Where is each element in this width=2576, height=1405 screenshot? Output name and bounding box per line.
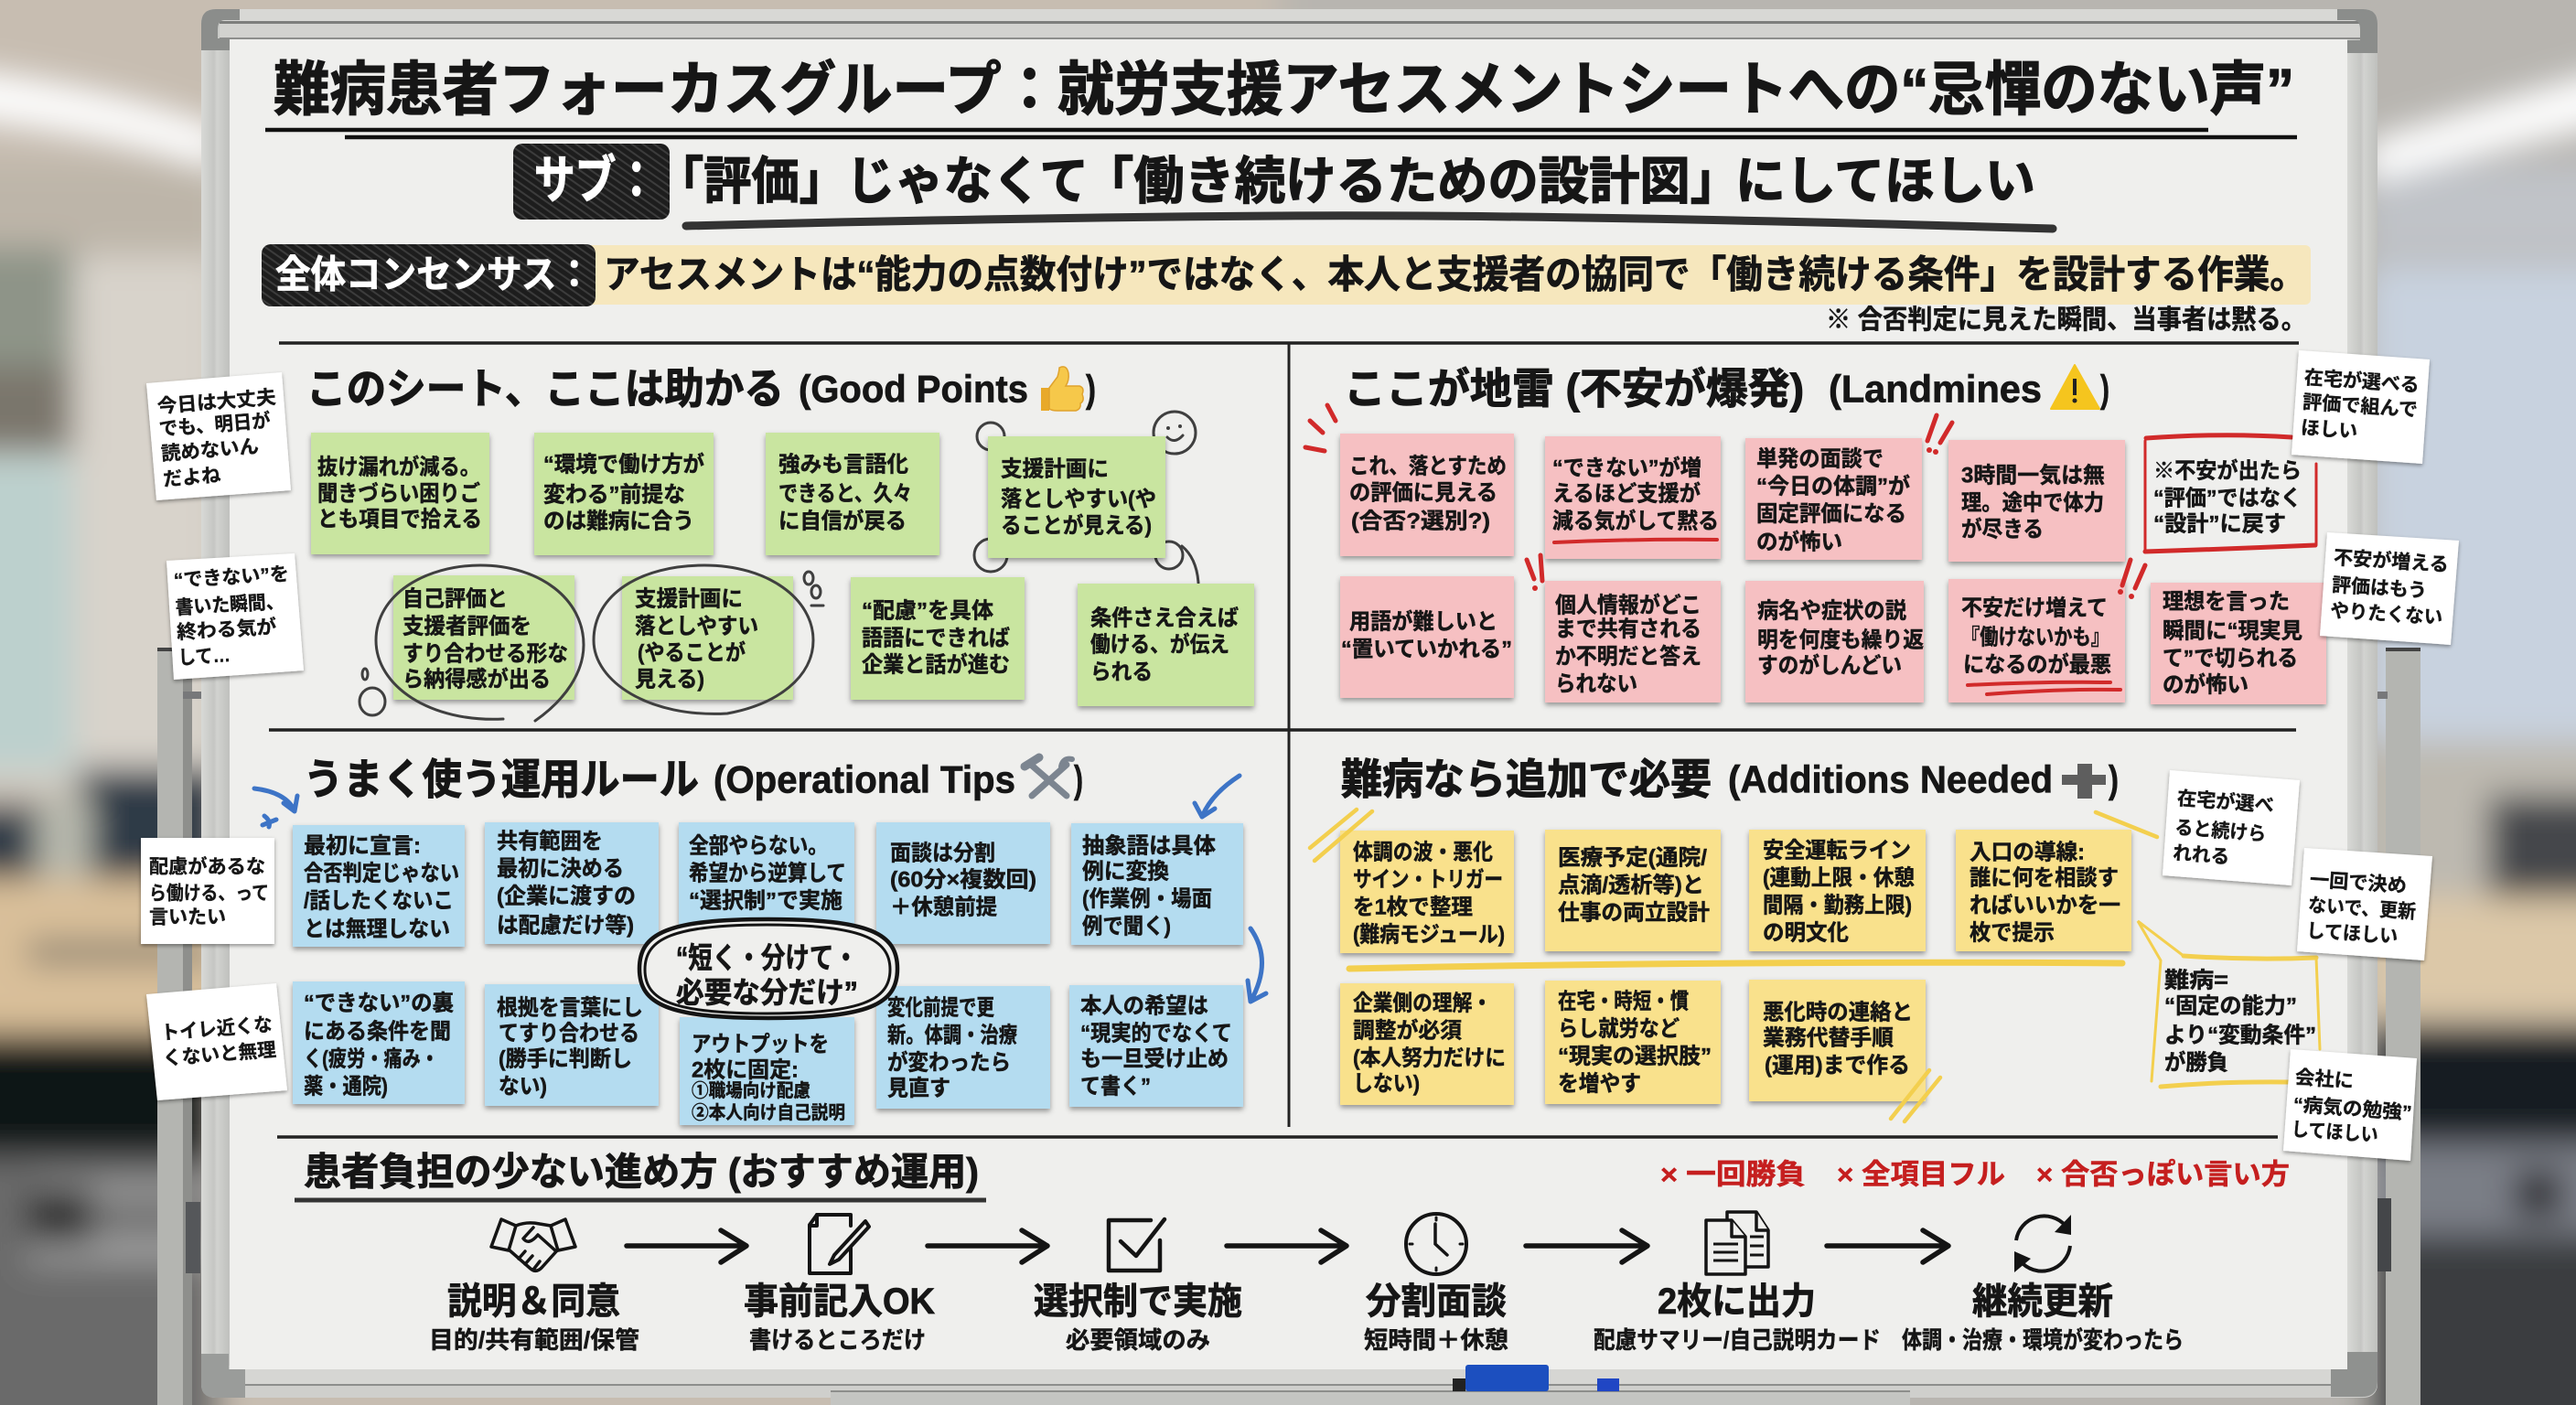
sticker: 在宅が選べる評価: 評価で組んで	[2302, 391, 2419, 421]
note: 本人の希望: 本人の希望は	[1080, 993, 1208, 1019]
note: 強みも言語化: に自信が戻る	[778, 509, 907, 534]
callout: red box: ※不安が出たら	[2153, 457, 2302, 483]
note: 配慮を具体語語に	[851, 577, 1025, 700]
callout: 難病=変動条件	[2138, 921, 2320, 1087]
step 2: 事前記入OK	[744, 1215, 935, 1354]
note: 支援計画に	[622, 576, 793, 700]
callout: 難病=変動条件: 難病=	[2164, 968, 2228, 993]
note: 安全運転ライン: 間隔・勤務上限)	[1763, 893, 1912, 918]
badge: sub	[513, 144, 670, 220]
callout: red box: “設計”に戻す	[2153, 512, 2286, 536]
note: アウトプット	[680, 1017, 854, 1125]
note: 医療予定	[1545, 830, 1721, 951]
icon: tools	[1025, 757, 1072, 796]
note: 落とすための評価: の評価に見える	[1349, 481, 1497, 505]
note: 全部やらない: 全部やらない。	[689, 834, 828, 858]
note: 最初に宣言: 合否判定じゃない	[304, 862, 459, 885]
note: 変化前提: 変化前提で更	[887, 995, 994, 1021]
callout: 難病=変動条件: が勝負	[2164, 1050, 2228, 1076]
heading: recommended flow: 患者負担の少ない進め方 (おすすめ運用)	[304, 1151, 979, 1193]
note: 入口の導線: ればいいかを一	[1970, 893, 2120, 918]
note: 入口の導線: 入口の導線:	[1970, 840, 2085, 865]
brush underline	[686, 216, 2053, 229]
note: 3時間一気は無理: 理。途中で体力	[1961, 490, 2104, 516]
note: 入口の導線	[1956, 830, 2131, 951]
step 3: 選択制で実施: 必要領域のみ	[1066, 1326, 1210, 1354]
heading: operational tips: うまく使う運用ルール	[304, 756, 699, 803]
note: 悪化時の連絡: 悪化時の連絡と	[1763, 1001, 1913, 1024]
subtitle with badge	[513, 144, 2053, 229]
note: 用語が難しい: “置いていかれる”	[1341, 637, 1512, 662]
heading: additions needed	[1341, 756, 2119, 803]
note: 単発の面談: 固定評価になる	[1756, 501, 1906, 527]
sticker: 配慮があるなら: ら働ける、って	[149, 884, 269, 904]
sticker: できないを書いた瞬間: 終わる気が	[177, 616, 277, 643]
note: 医療予定: 点滴/透析等)と	[1558, 873, 1704, 898]
note: 条件さえ合えば: られる	[1090, 660, 1153, 684]
sticker: 在宅が選べると続けられる	[2163, 770, 2300, 885]
subtitle text: 「働き続けるための設計図」	[1083, 152, 1741, 210]
note: 支援計画に落としやすい: 支援計画に	[1001, 457, 1109, 481]
note: 変化前提: 新。体調・治療	[887, 1023, 1017, 1048]
step 6: 継続更新: 体調・治療・環境が変わったら	[1902, 1326, 2184, 1354]
note: 安全運転ライン: 安全運転ライン	[1763, 838, 1911, 863]
note: 抜け漏れ: 抜け漏れが減る。	[317, 454, 480, 479]
heading: good points	[306, 365, 1096, 413]
arrow 1	[627, 1230, 746, 1262]
sticker: 今日は大丈夫: 今日は大丈夫	[156, 387, 277, 417]
note: 条件さえ合えば	[1078, 584, 1254, 706]
note: 変化前提	[876, 986, 1050, 1109]
sticker: 在宅が選べる評価: ほしい	[2300, 417, 2358, 443]
step 4: 分割面談	[1364, 1214, 1508, 1354]
note: 理想を言った: 理想を言った	[2163, 589, 2290, 615]
note: 入口の導線: 誰に何を相談す	[1970, 865, 2119, 891]
step 5: 2枚に出力	[1594, 1212, 1881, 1354]
note: 支援計画に落としやすい: 落としやすい(や	[1001, 487, 1156, 512]
note: 単発の面談	[1745, 438, 1922, 560]
arrow 5	[1827, 1230, 1948, 1262]
sticker: 不安が増える: 不安が増える	[2333, 547, 2450, 575]
consensus bar	[262, 244, 2311, 306]
note: 変化前提: 見直す	[887, 1076, 950, 1101]
note: 個人情報: まで共有される	[1555, 617, 1701, 642]
note: 安全運転ライン	[1749, 830, 1926, 951]
note: 支援計画に: 見える)	[635, 668, 704, 692]
consensus badge	[262, 244, 596, 306]
note: できないの裏: 薬・通院)	[304, 1074, 388, 1099]
callout: 難病=変動条件: “固定の能力”	[2164, 993, 2297, 1019]
panel: recommended flow	[295, 1151, 2290, 1354]
note: 強みも言語化: できると、久々	[778, 481, 912, 507]
note: 落とすための評価: これ、落とすため	[1349, 454, 1507, 479]
step 5: 2枚に出力: 配慮サマリー/自己説明カード	[1594, 1326, 1881, 1354]
note: 個人情報: か不明だと答え	[1555, 644, 1701, 670]
consensus text: アセスメントは“能力の点数付け”ではなく、本人と支援者の協同で「働き続ける条件」を設計する作業。	[604, 252, 2306, 296]
step 4: 分割面談: 短時間＋休憩	[1364, 1326, 1508, 1354]
sticker: 会社に病気の勉強: “病気の勉強”	[2292, 1094, 2412, 1124]
sticker: トイレ近く	[146, 983, 287, 1100]
note: 自己評価: すり合わせる形な	[402, 642, 568, 666]
note: 抜け漏れ	[311, 433, 489, 554]
callout: circled phrase	[639, 919, 897, 1018]
note: 共有範囲: 共有範囲を	[497, 829, 603, 854]
heading: additions needed: 難病なら追加で必要	[1341, 756, 1712, 803]
heading: good points: )	[1086, 368, 1096, 410]
note: 医療予定: 医療予定(通院/	[1558, 845, 1707, 871]
note: アウトプット: 2枚に固定:	[692, 1057, 799, 1083]
yellow marker strokes	[1310, 810, 2157, 1121]
sticker: 一回で決めないで: ないで、更新	[2307, 895, 2417, 923]
subtitle text	[656, 152, 2035, 210]
note: 全部やらない	[679, 822, 854, 945]
note: 条件さえ合えば: 条件さえ合えば	[1090, 606, 1239, 631]
heading: landmines	[1344, 365, 2109, 413]
note: できないが増える: “できない”が増	[1552, 456, 1701, 481]
arrow 2	[928, 1230, 1047, 1262]
sticker: 在宅が選べると続けられる: 在宅が選べ	[2176, 788, 2275, 817]
badge: sub: サブ：	[534, 152, 657, 209]
icon: document and pencil	[810, 1215, 869, 1273]
note: 面談は分割: ＋休憩前提	[890, 895, 997, 920]
note: 在宅・時短	[1545, 981, 1721, 1104]
note: 環境で働け方: 変わる”前提な	[543, 483, 685, 507]
writing surface	[230, 39, 2347, 1369]
sticker: 不安が増える	[2320, 532, 2459, 645]
note: 用語が難しい: 用語が難しいと	[1349, 609, 1497, 635]
note: アウトプット: ②本人向け自己説明	[692, 1102, 845, 1123]
note: 面談は分割: 面談は分割	[890, 842, 995, 865]
note: 安全運転ライン: の明文化	[1763, 920, 1849, 946]
note: できないの裏: にある条件を聞	[304, 1019, 451, 1045]
sticker: 不安が増える: 評価はもう	[2331, 574, 2428, 602]
heading: good points: このシート、ここは助かる	[306, 365, 784, 413]
sticker: 会社に病気の勉強: 会社に	[2294, 1067, 2355, 1092]
subtitle text: じゃなくて	[846, 152, 1089, 210]
note: 根拠を言葉に: てすり合わせる	[499, 1021, 639, 1046]
note: 最初に宣言: 最初に宣言:	[304, 834, 421, 858]
note: 配慮を具体語語に: “配慮”を具体	[862, 598, 993, 624]
note: 単発の面談: “今日の体調”が	[1756, 474, 1910, 499]
note: 面談は分割: (60分×複数回)	[890, 867, 1036, 893]
doodles: bubbles and smiley	[360, 412, 1198, 715]
note: 抽象語: 例に変換	[1082, 860, 1169, 884]
callout: 難病=変動条件: より“変動条件”	[2164, 1023, 2316, 1048]
note: 落とすための評価: (合否?選別?)	[1351, 509, 1490, 534]
heading: operational tips: (Operational Tips	[714, 757, 1015, 801]
subtitle text: 「評価」	[656, 152, 847, 210]
callout: circled phrase: 必要な分だけ”	[676, 976, 858, 1009]
note: 医療予定: 仕事の両立設計	[1558, 900, 1710, 926]
note: 体調の波: (難病モジュール)	[1353, 922, 1505, 948]
sticker: 配慮があるなら: 配慮があるな	[149, 856, 265, 878]
whiteboard stand legs	[157, 648, 2420, 1405]
note: 企業側の理解	[1340, 983, 1514, 1105]
note: 強みも言語化	[766, 433, 939, 555]
warnings in red: × 一回勝負	[1660, 1158, 1806, 1191]
sticker: 一回で決めないで: してほしい	[2306, 920, 2399, 948]
sticker: 一回で決めないで	[2297, 848, 2432, 960]
sticker: できないを書いた瞬間: 書いた瞬間、	[175, 592, 284, 618]
note: 抽象語	[1071, 823, 1243, 945]
sticker: 今日は大丈夫: だよね	[162, 465, 221, 490]
note: 単発の面談: のが怖い	[1756, 529, 1842, 554]
sticker: 在宅が選べる評価	[2292, 350, 2430, 464]
note: 病名や症状	[1745, 581, 1924, 702]
note: 変化前提: が変わったら	[887, 1050, 1011, 1076]
icon: plus	[2062, 764, 2106, 799]
note: できないの裏: “できない”の裏	[304, 990, 454, 1015]
sticker: トイレ近く: トイレ近くな	[160, 1014, 274, 1044]
sticker: 配慮があるなら	[141, 838, 274, 944]
note: 企業側の理解: 調整が必須	[1353, 1017, 1462, 1043]
note: できないの裏: く(疲労・痛み・	[304, 1046, 439, 1072]
note: 条件さえ合えば: 働ける、が伝え	[1090, 631, 1229, 657]
note: 共有範囲	[485, 822, 659, 944]
note: 自己評価: 自己評価と	[402, 587, 508, 611]
note: 最初に宣言	[293, 825, 465, 947]
sticker: できないを書いた瞬間: “できない”を	[173, 563, 289, 591]
icon: thumbs up	[1041, 367, 1083, 411]
note: 在宅・時短: 在宅・時短・慣	[1558, 990, 1689, 1014]
main title: 難病患者フォーカスグループ：就労支援アセスメントシートへの“忌憚のない声”	[274, 57, 2294, 123]
note: 根拠を言葉に: 根拠を言葉にし	[497, 995, 643, 1021]
sticker: できないを書いた瞬間: して…	[177, 645, 231, 669]
note: 自己評価: 支援者評価を	[402, 615, 531, 638]
note: 共有範囲: 最初に決める	[497, 856, 624, 882]
note: 最初に宣言: /話したくないこ	[304, 889, 454, 913]
note: 病名や症状: すのがしんどい	[1757, 653, 1902, 679]
sticker: 配慮があるなら: 言いたい	[149, 907, 226, 928]
warnings in red	[1660, 1158, 2290, 1191]
icon: two documents	[1706, 1212, 1768, 1274]
note: 個人情報: 個人情報がどこ	[1555, 593, 1701, 618]
note: 抽象語: (作業例・場面	[1082, 887, 1212, 911]
sticker: 在宅が選べる評価: 在宅が選べる	[2303, 367, 2420, 396]
note: 自己評価: ら納得感が出る	[402, 666, 551, 692]
heading: landmines: )	[2100, 368, 2109, 410]
note: できないが増える: 減る気がして黙る	[1552, 509, 1719, 534]
note: 環境で働け方: “環境で働け方が	[543, 452, 704, 477]
note: 3時間一気は無理: が尽きる	[1961, 516, 2044, 542]
note: 本人の希望: も一旦受け止め	[1080, 1046, 1229, 1072]
note: 病名や症状: 病名や症状の説	[1757, 598, 1906, 624]
note: 病名や症状: 明を何度も繰り返	[1757, 627, 1924, 653]
note: 全部やらない: “選択制”で実施	[689, 889, 843, 913]
icon: warning	[2051, 365, 2099, 409]
note: 根拠を言葉に: ない)	[499, 1074, 547, 1099]
red alert ticks	[1305, 405, 2145, 599]
note: 面談は分割	[876, 822, 1050, 944]
note: 悪化時の連絡: 業務代替手順	[1763, 1026, 1894, 1050]
note: 環境で働け方	[534, 433, 714, 555]
heading: good points: (Good Points	[799, 368, 1028, 410]
note: 最初に宣言: とは無理しない	[304, 917, 450, 942]
note: 企業側の理解: (本人努力だけに	[1353, 1046, 1506, 1070]
hand-drawn circles	[376, 565, 813, 721]
note: 支援計画に: (やることが	[638, 640, 746, 666]
note: 不安だけ増えて: 『働けないかも』	[1961, 626, 2109, 649]
note: アウトプット: ①職場向け配慮	[692, 1080, 810, 1101]
note: 本人の希望: “現実的でなくて	[1080, 1021, 1232, 1046]
callout: red box	[2145, 435, 2316, 552]
note: 在宅・時短: を増やす	[1558, 1072, 1641, 1096]
subtitle text: にしてほしい	[1735, 152, 2035, 210]
note: 3時間一気は無理: 3時間一気は無	[1961, 463, 2105, 488]
note: 個人情報: られない	[1555, 671, 1637, 697]
sticker: 会社に病気の勉強: してほしい	[2291, 1119, 2379, 1146]
note: 企業側の理解: 企業側の理解・	[1353, 992, 1492, 1015]
marker eraser	[1453, 1365, 1619, 1391]
note: 支援計画に落としやすい: ることが見える)	[1001, 512, 1152, 538]
note: 3時間一気は無理	[1948, 440, 2125, 562]
warnings in red: × 全項目フル	[1837, 1158, 2005, 1191]
note: 抜け漏れ: とも項目で拾える	[317, 507, 482, 532]
sticker: 今日は大丈夫: でも、明日が	[158, 410, 272, 440]
sticker: 在宅が選べると続けられる: ると続けら	[2174, 817, 2267, 845]
note: 体調の波: 体調の波・悪化	[1353, 840, 1493, 865]
icon: checkbox	[1109, 1219, 1165, 1271]
note: 在宅・時短: “現実の選択肢”	[1558, 1045, 1712, 1068]
note: 企業側の理解: しない)	[1353, 1072, 1420, 1096]
heading: additions needed: )	[2109, 757, 2119, 801]
note: できないが増える	[1545, 436, 1721, 559]
note: 抜け漏れ: 聞きづらい困りご	[317, 481, 480, 507]
note: アウトプット: アウトプットを	[692, 1032, 829, 1057]
note: 理想を言った	[2151, 583, 2326, 704]
note: 体調の波	[1340, 831, 1514, 953]
note: 悪化時の連絡: (運用)まで作る	[1765, 1054, 1910, 1078]
sticker: 一回で決めないで: 一回で決め	[2309, 870, 2408, 896]
note: 不安だけ増えて: になるのが最悪	[1963, 651, 2111, 677]
sticker: 今日は大丈夫	[146, 372, 291, 500]
panel: landmines	[1305, 365, 2326, 704]
heading: landmines: ここが地雷 (不安が爆発)	[1344, 365, 1804, 413]
step 5: 2枚に出力: 2枚に出力	[1658, 1282, 1816, 1322]
note: 不安だけ増えて: 不安だけ増えて	[1961, 596, 2108, 620]
note: 個人情報	[1545, 581, 1721, 702]
note: 強みも言語化: 強みも言語化	[778, 452, 908, 477]
note: 根拠を言葉に: (勝手に判断し	[499, 1046, 632, 1072]
note: 理想を言った: 瞬間に“現実見	[2163, 618, 2302, 644]
heading: operational tips: )	[1074, 757, 1083, 801]
icon: handshake	[491, 1219, 575, 1271]
step 1: 説明＆同意: 目的/共有範囲/保管	[429, 1326, 639, 1354]
note: 共有範囲: は配慮だけ等)	[497, 913, 634, 938]
note: 入口の導線: 枚で提示	[1970, 920, 2055, 946]
warnings in red: × 合否っぽい言い方	[2036, 1158, 2290, 1191]
highlight band	[585, 245, 2311, 305]
step 3: 選択制で実施: 選択制で実施	[1034, 1282, 1242, 1322]
note: 配慮を具体語語に: 語語にできれば	[862, 626, 1010, 651]
consensus badge: 全体コンセンサス：	[275, 252, 592, 296]
note: できないの裏	[293, 981, 465, 1104]
note: 共有範囲: (企業に渡すの	[497, 884, 636, 909]
note: 全部やらない: 希望から逆算して	[689, 862, 846, 885]
panel: additions needed	[1310, 756, 2320, 1121]
note: 本人の希望: て書く”	[1080, 1074, 1151, 1099]
note: 単発の面談: 単発の面談で	[1756, 446, 1884, 472]
note: 自己評価	[393, 575, 574, 700]
note: 体調の波: サイン・トリガー	[1353, 867, 1503, 893]
note: 支援計画に: 落としやすい	[635, 615, 758, 638]
arrow 3	[1227, 1230, 1347, 1262]
step 4: 分割面談: 分割面談	[1366, 1282, 1507, 1322]
note: 悪化時の連絡	[1749, 980, 1926, 1101]
panel: operational tips	[254, 756, 1266, 1125]
arrow 4	[1526, 1230, 1648, 1262]
note: 落とすための評価	[1340, 434, 1514, 556]
step 6: 継続更新	[1902, 1215, 2184, 1354]
note: 在宅・時短: らし就労など	[1558, 1017, 1680, 1041]
note: 安全運転ライン: (連動上限・休憩	[1763, 865, 1915, 891]
note: 環境で働け方: のは難病に合う	[543, 509, 694, 534]
note: 本人の希望	[1069, 985, 1243, 1107]
footnote: ※ 合否判定に見えた瞬間、当事者は黙る。	[1826, 305, 2306, 335]
step 1: 説明＆同意	[429, 1219, 639, 1354]
step 6: 継続更新: 継続更新	[1972, 1282, 2113, 1322]
note: 根拠を言葉に	[485, 984, 659, 1106]
callout: circled phrase: “短く・分けて・	[676, 941, 858, 974]
sticker: 今日は大丈夫: 読めないん	[160, 436, 260, 465]
callout: red box: “評価”ではなく	[2153, 487, 2302, 510]
note: 用語が難しい	[1340, 576, 1514, 698]
note: 体調の波: を1枚で整理	[1353, 895, 1473, 920]
note: 支援計画に落としやすい	[988, 436, 1165, 558]
note: 理想を言った: のが怖い	[2163, 671, 2249, 697]
sticker: トイレ近く: くないと無理	[162, 1040, 277, 1069]
heading: additions needed: (Additions Needed	[1728, 757, 2053, 801]
heading: landmines: (Landmines	[1829, 368, 2042, 410]
note: 抽象語: 例で聞く)	[1082, 915, 1171, 938]
step 2: 事前記入OK: 事前記入OK	[744, 1282, 935, 1322]
note: できないが増える: えるほど支援が	[1552, 481, 1701, 507]
step 1: 説明＆同意: 説明＆同意	[447, 1282, 620, 1322]
panel: good points	[306, 365, 1254, 721]
sticker: 不安が増える: やりたくない	[2330, 600, 2443, 628]
sticker: 会社に病気の勉強	[2283, 1049, 2417, 1161]
icon: refresh	[2014, 1215, 2071, 1272]
note: 支援計画に: 支援計画に	[635, 587, 743, 611]
step 3: 選択制で実施	[1034, 1219, 1242, 1354]
icon: clock	[1406, 1214, 1466, 1274]
sticker: できないを書いた瞬間	[166, 553, 304, 680]
step 2: 事前記入OK: 書けるところだけ	[749, 1326, 926, 1354]
blue arrows	[254, 776, 1266, 1002]
heading: operational tips	[304, 756, 1083, 803]
note: 配慮を具体語語に: 企業と話が進む	[862, 651, 1010, 677]
note: 抽象語: 抽象語は具体	[1082, 834, 1216, 858]
note: 理想を言った: て”で切られる	[2163, 646, 2298, 671]
sticker: 在宅が選べると続けられる: れれる	[2173, 842, 2230, 868]
note: 不安だけ増えて	[1948, 579, 2125, 702]
